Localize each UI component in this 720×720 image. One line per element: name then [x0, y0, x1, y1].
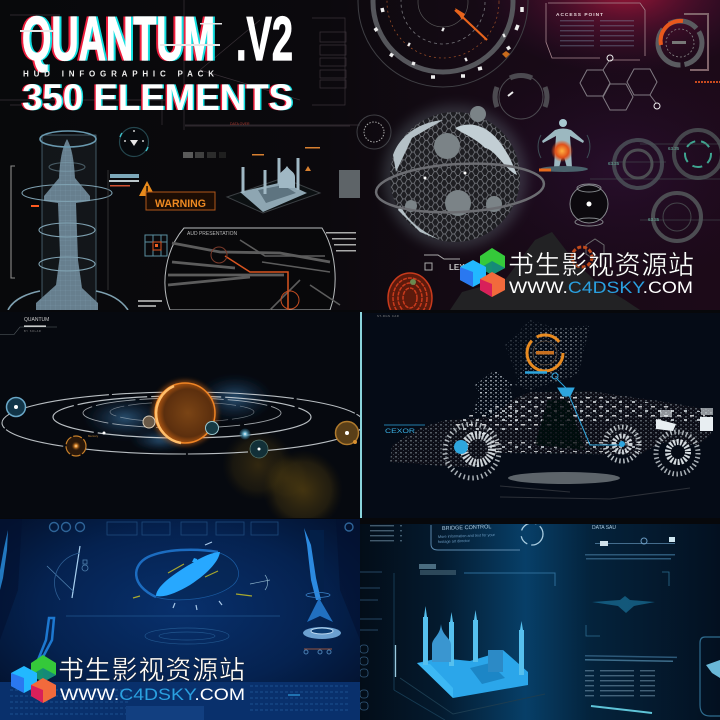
icon: mosque wireframe [227, 158, 320, 213]
panel row: top readouts [107, 522, 278, 535]
panel: hero HUD overview: DATA OVER [230, 122, 250, 126]
icon: top circle row [50, 522, 353, 532]
panel: access point [546, 3, 645, 60]
callout: bridge control [431, 524, 520, 550]
text: rocket readout [109, 174, 139, 186]
illustration: submarine in radar [133, 542, 270, 610]
icon: sphere orb [570, 184, 608, 226]
illustration: central planet [152, 380, 218, 446]
text: mosque labels [252, 147, 320, 171]
text block: right-side mini data card [339, 170, 360, 198]
text: HUD car label: CEXOR [385, 428, 415, 435]
text: watermark name: 书生影视资源站 [508, 245, 694, 282]
icon: blue planet [6, 398, 26, 416]
text: lower left caption [138, 300, 162, 307]
callout: blue connector [525, 372, 622, 445]
text: planet label: Mercury [88, 434, 99, 438]
diagram: orbits [2, 392, 364, 454]
illustration: lens flares [228, 435, 338, 518]
icon: small planets [102, 416, 268, 458]
icon: circular badge [495, 75, 547, 119]
text: quantum caption: QUANTUM [24, 317, 49, 323]
diagram: bottom ellipse [66, 616, 280, 644]
icon: orange grid selector [145, 235, 167, 256]
icon: gold planet [336, 422, 358, 444]
text: car caption: ST-RGN CAR [377, 314, 399, 318]
icon: molecule hexagons [580, 55, 660, 110]
chart: ring gauges: 63.35 [608, 161, 620, 166]
icon: orange ring gauge [527, 335, 563, 371]
glitch title: .V2 [236, 5, 293, 74]
callout: warning [146, 192, 215, 210]
panel: point cloud car [362, 313, 720, 518]
text: quantum caption [0, 317, 57, 334]
icon: orange gauge ring [658, 14, 720, 82]
icon: small swatches [183, 152, 226, 158]
text: quantum caption: BY SOLAR [24, 330, 41, 333]
text block: top left paragraph [370, 524, 402, 542]
panel: map schematic: AUD PRESENTATION [187, 231, 237, 237]
text: watermark name: 书生影视资源站 [58, 650, 245, 687]
icon: small dial [521, 523, 543, 545]
glitch title: QUANTUM [22, 5, 215, 74]
illustration: nebula smoke [89, 378, 268, 451]
icon: compass reticle [120, 128, 148, 156]
frame: right plane [586, 572, 669, 636]
illustration: hex globe [375, 105, 545, 249]
text: right map side list [326, 232, 356, 252]
icon: fingerprint [387, 272, 433, 310]
icon: right rocket [303, 528, 341, 654]
text: watermark URL: WWW. C4DSKY .COM [60, 686, 245, 704]
chart: left arc gauge [47, 546, 88, 600]
icon: radar dial [358, 0, 528, 87]
chart: ring gauges: 63.35 [668, 146, 680, 151]
panel: access point: ACCESS POINT [556, 12, 604, 18]
icon: orange planet [66, 436, 86, 456]
illustration: molecule under logo [586, 239, 604, 260]
callout: bridge control: footage art director [438, 539, 471, 544]
illustration: mosque hologram [400, 606, 545, 714]
icon: left mini dial [357, 115, 391, 149]
chart: ring gauges [590, 130, 720, 241]
background circuit diagram [0, 0, 360, 130]
glitch title: QUANTUM [24, 5, 217, 74]
panel: hero HUD overview [0, 0, 720, 323]
icon: rocket hologram in cylinder [8, 131, 128, 310]
glitch title: 350 ELEMENTS [20, 77, 292, 118]
icon: human body scan [538, 119, 590, 172]
icon: hologram aircraft [592, 596, 655, 613]
glitch title: 350 ELEMENTS [22, 77, 293, 118]
panel: solar system [0, 312, 364, 530]
icon: right hologram piece [706, 660, 720, 678]
callout: bridge control: BRIDGE CONTROL [442, 524, 492, 532]
text: data section: DATA SAU [592, 525, 616, 531]
glitch title: 350 ELEMENTS [24, 77, 294, 118]
callout: bridge control: More information and text for your [438, 533, 496, 539]
list: left menu [360, 572, 396, 710]
logo: bottom watermark [11, 655, 56, 703]
illustration: open gullwing door [515, 325, 590, 390]
callout: warning: WARNING [155, 198, 206, 210]
icon: car wheels [445, 424, 698, 478]
icon: warning triangle [139, 181, 152, 196]
illustration: car body point cloud [390, 320, 712, 468]
logo: top watermark [460, 248, 505, 297]
chart: ring gauges: 63.35 [648, 217, 660, 222]
text: data section [585, 525, 675, 560]
text: LEXO tag: LEXO [449, 263, 471, 272]
glitch title [20, 16, 293, 110]
panel: blue mosque HUD [360, 523, 720, 720]
panel: lower control deck [0, 682, 360, 720]
panel: blue submarine HUD [0, 519, 360, 720]
panel: map schematic [165, 228, 340, 310]
text: HUD car label [362, 425, 425, 435]
text: LEXO tag [424, 254, 464, 270]
frame: right rounded panel [700, 637, 720, 716]
text block: right paragraph [585, 655, 677, 713]
glitch title: HUD INFOGRAPHIC PACK [23, 70, 214, 78]
icon: left small rocket [0, 530, 8, 590]
divider: panel edge [360, 312, 362, 518]
text: watermark URL: WWW. C4DSKY .COM [509, 279, 693, 297]
decoration: side rails [0, 519, 360, 640]
illustration: mountain terrain [450, 232, 640, 310]
icon: white crates [656, 408, 713, 431]
illustration: floor glow [500, 472, 690, 499]
frame: mosque bracket [394, 564, 555, 720]
icon: orange emblem behind logo [572, 247, 592, 267]
icon: left tower rocket [38, 618, 54, 660]
glitch title: QUANTUM [20, 5, 213, 74]
